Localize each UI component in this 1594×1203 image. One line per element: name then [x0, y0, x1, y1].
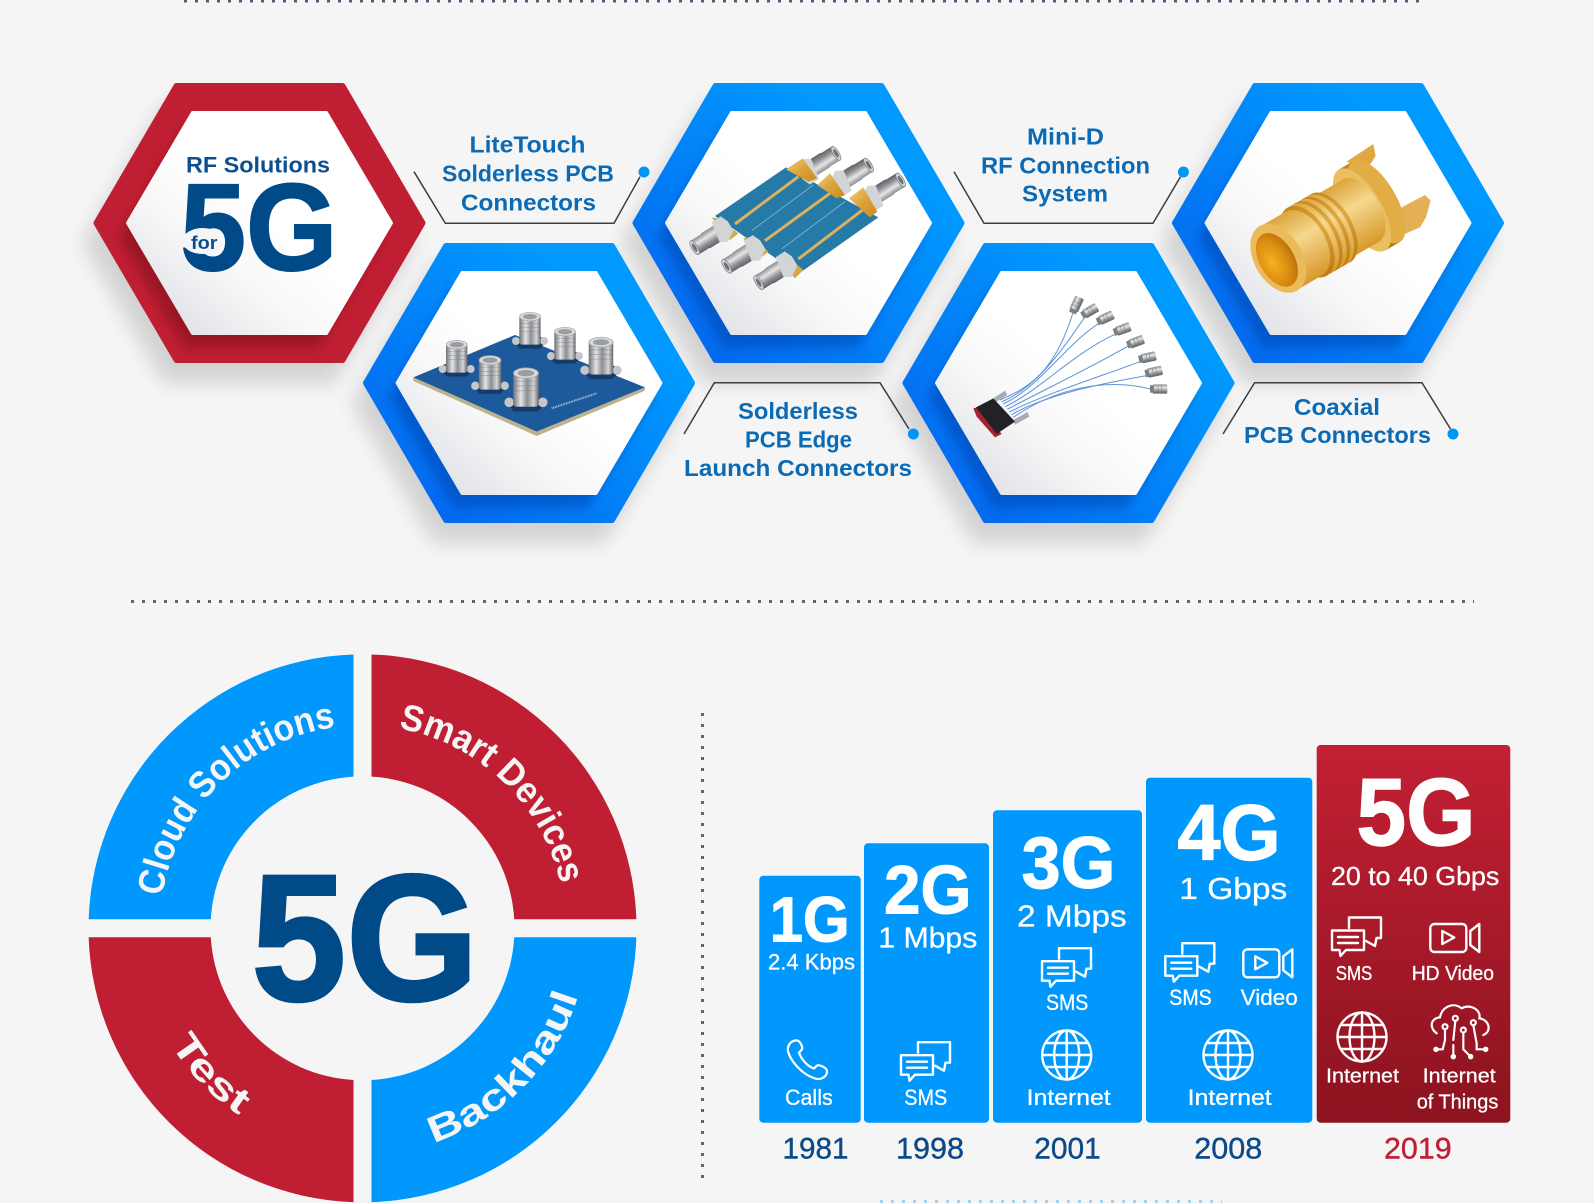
bar: 5G: SMS — [1336, 963, 1372, 985]
bar: 5G: Internet — [1326, 1066, 1399, 1088]
bar: 5G: Internet — [1423, 1066, 1496, 1088]
icon: internet of things — [1432, 1005, 1489, 1058]
callout: Coaxial PCB Connectors: Coaxial — [1294, 394, 1380, 420]
icon: video — [1243, 949, 1292, 977]
bar: 4G — [1146, 778, 1312, 1123]
bar: 3G: SMS — [1046, 990, 1088, 1015]
callout: LiteTouch Solderless PCB Connectors: LiteTouch — [470, 132, 586, 158]
callout: LiteTouch Solderless PCB Connectors: Connectors — [461, 190, 596, 216]
cut-out behind for — [182, 228, 222, 254]
bar: 3G: 3G — [1022, 823, 1116, 904]
bar: 3G: 2 Mbps — [1017, 899, 1127, 934]
callout: Mini-D RF Connection System — [954, 123, 1189, 223]
panel: RF solutions for 5G hexagon — [86, 86, 422, 380]
year labels — [782, 1132, 1452, 1165]
bar: 5G: of Things — [1417, 1091, 1498, 1113]
bar: 3G — [993, 810, 1142, 1123]
icon: globe — [1204, 1030, 1252, 1080]
heading: RF Solutions: RF Solutions — [186, 153, 330, 178]
segment: Cloud Solutions — [88, 654, 354, 920]
bar: 5G: 5G — [1356, 759, 1476, 866]
panel: Mini-D / solderless connector hexagon with strip board — [626, 86, 962, 380]
callout: Mini-D RF Connection System: Mini-D — [1027, 123, 1104, 149]
segment: Backhaul — [372, 937, 636, 1202]
bar: 2G: SMS — [904, 1085, 947, 1110]
bar: 4G: Internet — [1188, 1085, 1272, 1110]
bar: 5G: 20 to 40 Gbps — [1331, 861, 1499, 891]
icon: SMS — [1165, 943, 1214, 982]
segment: Cloud Solutions: Cloud Solutions — [138, 708, 334, 893]
heading: 5G centre: 5G — [252, 838, 478, 1039]
icon: globe — [1042, 1030, 1091, 1080]
callout: Mini-D RF Connection System: RF Connection — [981, 152, 1150, 178]
icon: video — [1430, 924, 1479, 952]
bar: 5G — [1317, 745, 1510, 1123]
donut chart: 5G segments — [88, 654, 636, 1202]
image: coaxial gold connector — [1234, 144, 1431, 311]
segment: Backhaul: Backhaul — [426, 990, 578, 1142]
bar: 1G: 2.4 Kbps — [768, 949, 855, 974]
year labels: 1998 — [896, 1132, 964, 1165]
callout: LiteTouch Solderless PCB Connectors: Solderless PCB — [442, 160, 614, 186]
bar: 2G: 1 Mbps — [878, 922, 977, 954]
year labels: 2008 — [1194, 1132, 1262, 1165]
bar: 3G: Internet — [1027, 1085, 1111, 1110]
bar: 4G: SMS — [1169, 985, 1212, 1010]
segment: Test — [88, 937, 354, 1202]
bar: 4G: Video — [1241, 985, 1298, 1010]
panel: cable harness hexagon — [896, 246, 1232, 540]
bar: 5G: HD Video — [1412, 963, 1494, 985]
image: strip board connectors — [685, 141, 910, 295]
callout: Mini-D RF Connection System: System — [1022, 181, 1108, 207]
panel: coaxial PCB connector hexagon — [1165, 86, 1501, 380]
panel: LiteTouch board hexagon — [356, 246, 692, 540]
bar: 4G: 1 Gbps — [1179, 871, 1287, 906]
icon: SMS — [1042, 948, 1091, 987]
segment: Smart Devices: Smart Devices — [401, 705, 578, 882]
bar: 4G: 4G — [1178, 787, 1280, 876]
text: for: for — [191, 233, 218, 253]
year labels: 2019 — [1384, 1132, 1452, 1165]
callout: LiteTouch Solderless PCB Connectors — [414, 132, 650, 223]
icon: globe — [1338, 1012, 1386, 1062]
icon: phone — [788, 1040, 827, 1079]
bar: 1G — [759, 876, 861, 1123]
bar: 2G: 2G — [884, 851, 972, 928]
image: solderless board connectors — [413, 312, 645, 436]
callout: Solderless PCB Edge Launch Connectors: Solderless — [738, 398, 858, 424]
bar: 2G — [864, 843, 989, 1123]
bar: 1G: 1G — [770, 884, 850, 956]
bar: 1G: Calls — [785, 1085, 833, 1110]
heading: 5G: 5G — [180, 160, 338, 297]
callout: Coaxial PCB Connectors — [1223, 383, 1458, 448]
icon: SMS — [901, 1042, 950, 1081]
icon: SMS — [1332, 918, 1381, 956]
callout: Solderless PCB Edge Launch Connectors: Launch Connectors — [684, 455, 912, 481]
callout: Solderless PCB Edge Launch Connectors: PCB Edge — [745, 426, 852, 452]
segment: Test: Test — [176, 1030, 250, 1115]
callout: Solderless PCB Edge Launch Connectors — [684, 383, 919, 481]
image: cable harness — [973, 295, 1167, 437]
callout: Coaxial PCB Connectors: PCB Connectors — [1244, 422, 1431, 448]
year labels: 2001 — [1034, 1132, 1101, 1165]
year labels: 1981 — [782, 1132, 848, 1165]
segment: Smart Devices — [372, 654, 636, 920]
